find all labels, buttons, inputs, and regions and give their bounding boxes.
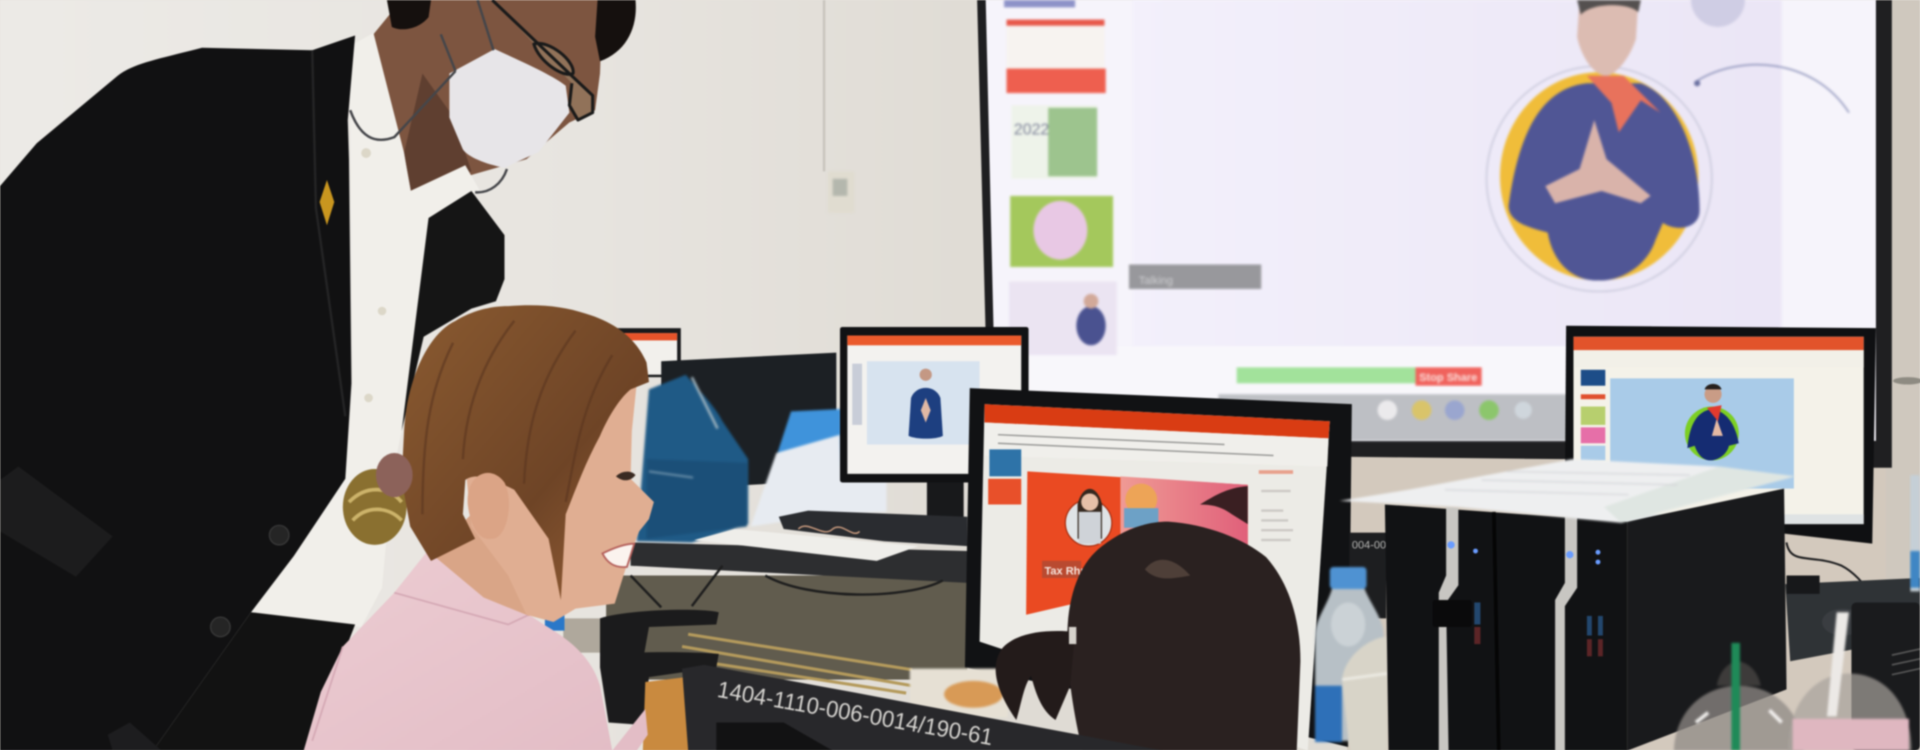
trousers (153, 612, 355, 750)
slide badge: Tax Rhno (1044, 565, 1094, 577)
sun and palm (1124, 484, 1248, 528)
smile (602, 544, 634, 567)
small far monitor (610, 328, 681, 377)
blue folder and papers (751, 409, 887, 527)
decorative arc on slide (1691, 0, 1849, 113)
wooden table edge (643, 677, 693, 750)
centre monitor (965, 388, 1352, 750)
eye (616, 472, 636, 480)
man hair (387, 0, 636, 61)
slide portrait (1065, 489, 1112, 546)
pink blazer (304, 550, 648, 750)
grey tag (1129, 264, 1261, 289)
jacket buttons (211, 525, 289, 637)
glasses (492, 0, 593, 120)
projector screen (977, 0, 1892, 468)
slide in ribbon window (1026, 471, 1248, 615)
white shirt (251, 33, 480, 627)
right desk (1785, 576, 1920, 661)
man (0, 0, 636, 750)
keyboard (779, 511, 967, 546)
thermostat (828, 171, 855, 213)
presenter figure on screen (1487, 0, 1712, 291)
black monitor side between: 004-00 (1352, 540, 1386, 552)
jacket lapel line (312, 50, 345, 416)
face (465, 383, 654, 622)
slide thumbnails: 2022 (1014, 122, 1049, 139)
hair (402, 305, 649, 600)
plastic cup (1342, 637, 1387, 750)
notebook paper on desk (694, 526, 918, 561)
black monitor side between (1349, 533, 1386, 618)
second monitor (840, 327, 1029, 522)
jacket right panel (402, 191, 504, 431)
mask straps and lanyard (350, 0, 507, 192)
food box (910, 669, 1008, 718)
neck shadow (404, 73, 471, 193)
twin desktop computers (1385, 489, 1787, 750)
left chair corner (108, 722, 162, 750)
taskbar (1218, 394, 1567, 441)
right monitor (1565, 326, 1876, 544)
man neck and face (373, 0, 602, 193)
neck (431, 514, 539, 616)
silver strips (1439, 507, 1577, 750)
sidebar thumbnails (1581, 370, 1605, 460)
far right shelf item (1893, 377, 1920, 384)
ear (468, 473, 509, 539)
slide thumbnails (1004, 0, 1117, 355)
black speaker box (1851, 602, 1920, 750)
black chair arms (545, 609, 719, 725)
usb dongle (1433, 600, 1472, 627)
power LEDs (1447, 541, 1600, 564)
water bottle (1315, 567, 1384, 742)
grey tag: Talking (1139, 275, 1173, 287)
share bar: Stop Share (1419, 372, 1477, 384)
papers on computers (1340, 459, 1795, 523)
hair strands (422, 321, 612, 514)
backpack (637, 375, 748, 542)
collar line (312, 593, 529, 741)
scrunchie (376, 453, 413, 497)
figure on second monitor (909, 369, 943, 439)
seated person head from behind (996, 522, 1300, 750)
jacket main (0, 36, 355, 750)
powerpoint ribbon (984, 404, 1330, 438)
share bar (1237, 367, 1482, 386)
far right bottle (1910, 475, 1920, 591)
face mask (449, 49, 569, 168)
cable right (1787, 542, 1878, 602)
desk (606, 542, 967, 693)
chair back foreground (682, 665, 1163, 750)
slide badge (1042, 561, 1094, 578)
format pane (1259, 470, 1293, 541)
shirt buttons (357, 148, 386, 483)
gold pin (320, 180, 334, 225)
pink smoothie cup with straw (1788, 612, 1911, 750)
figure on right monitor (1685, 384, 1739, 460)
drink cup with green straw (1674, 643, 1804, 750)
usb ports (1474, 602, 1603, 656)
hair bun (343, 469, 407, 545)
thumbnails (989, 449, 1021, 476)
ponytail (996, 631, 1075, 720)
woman with pink blazer (304, 305, 654, 750)
desktop tower rear (661, 353, 836, 490)
jacket pocket (0, 467, 113, 577)
